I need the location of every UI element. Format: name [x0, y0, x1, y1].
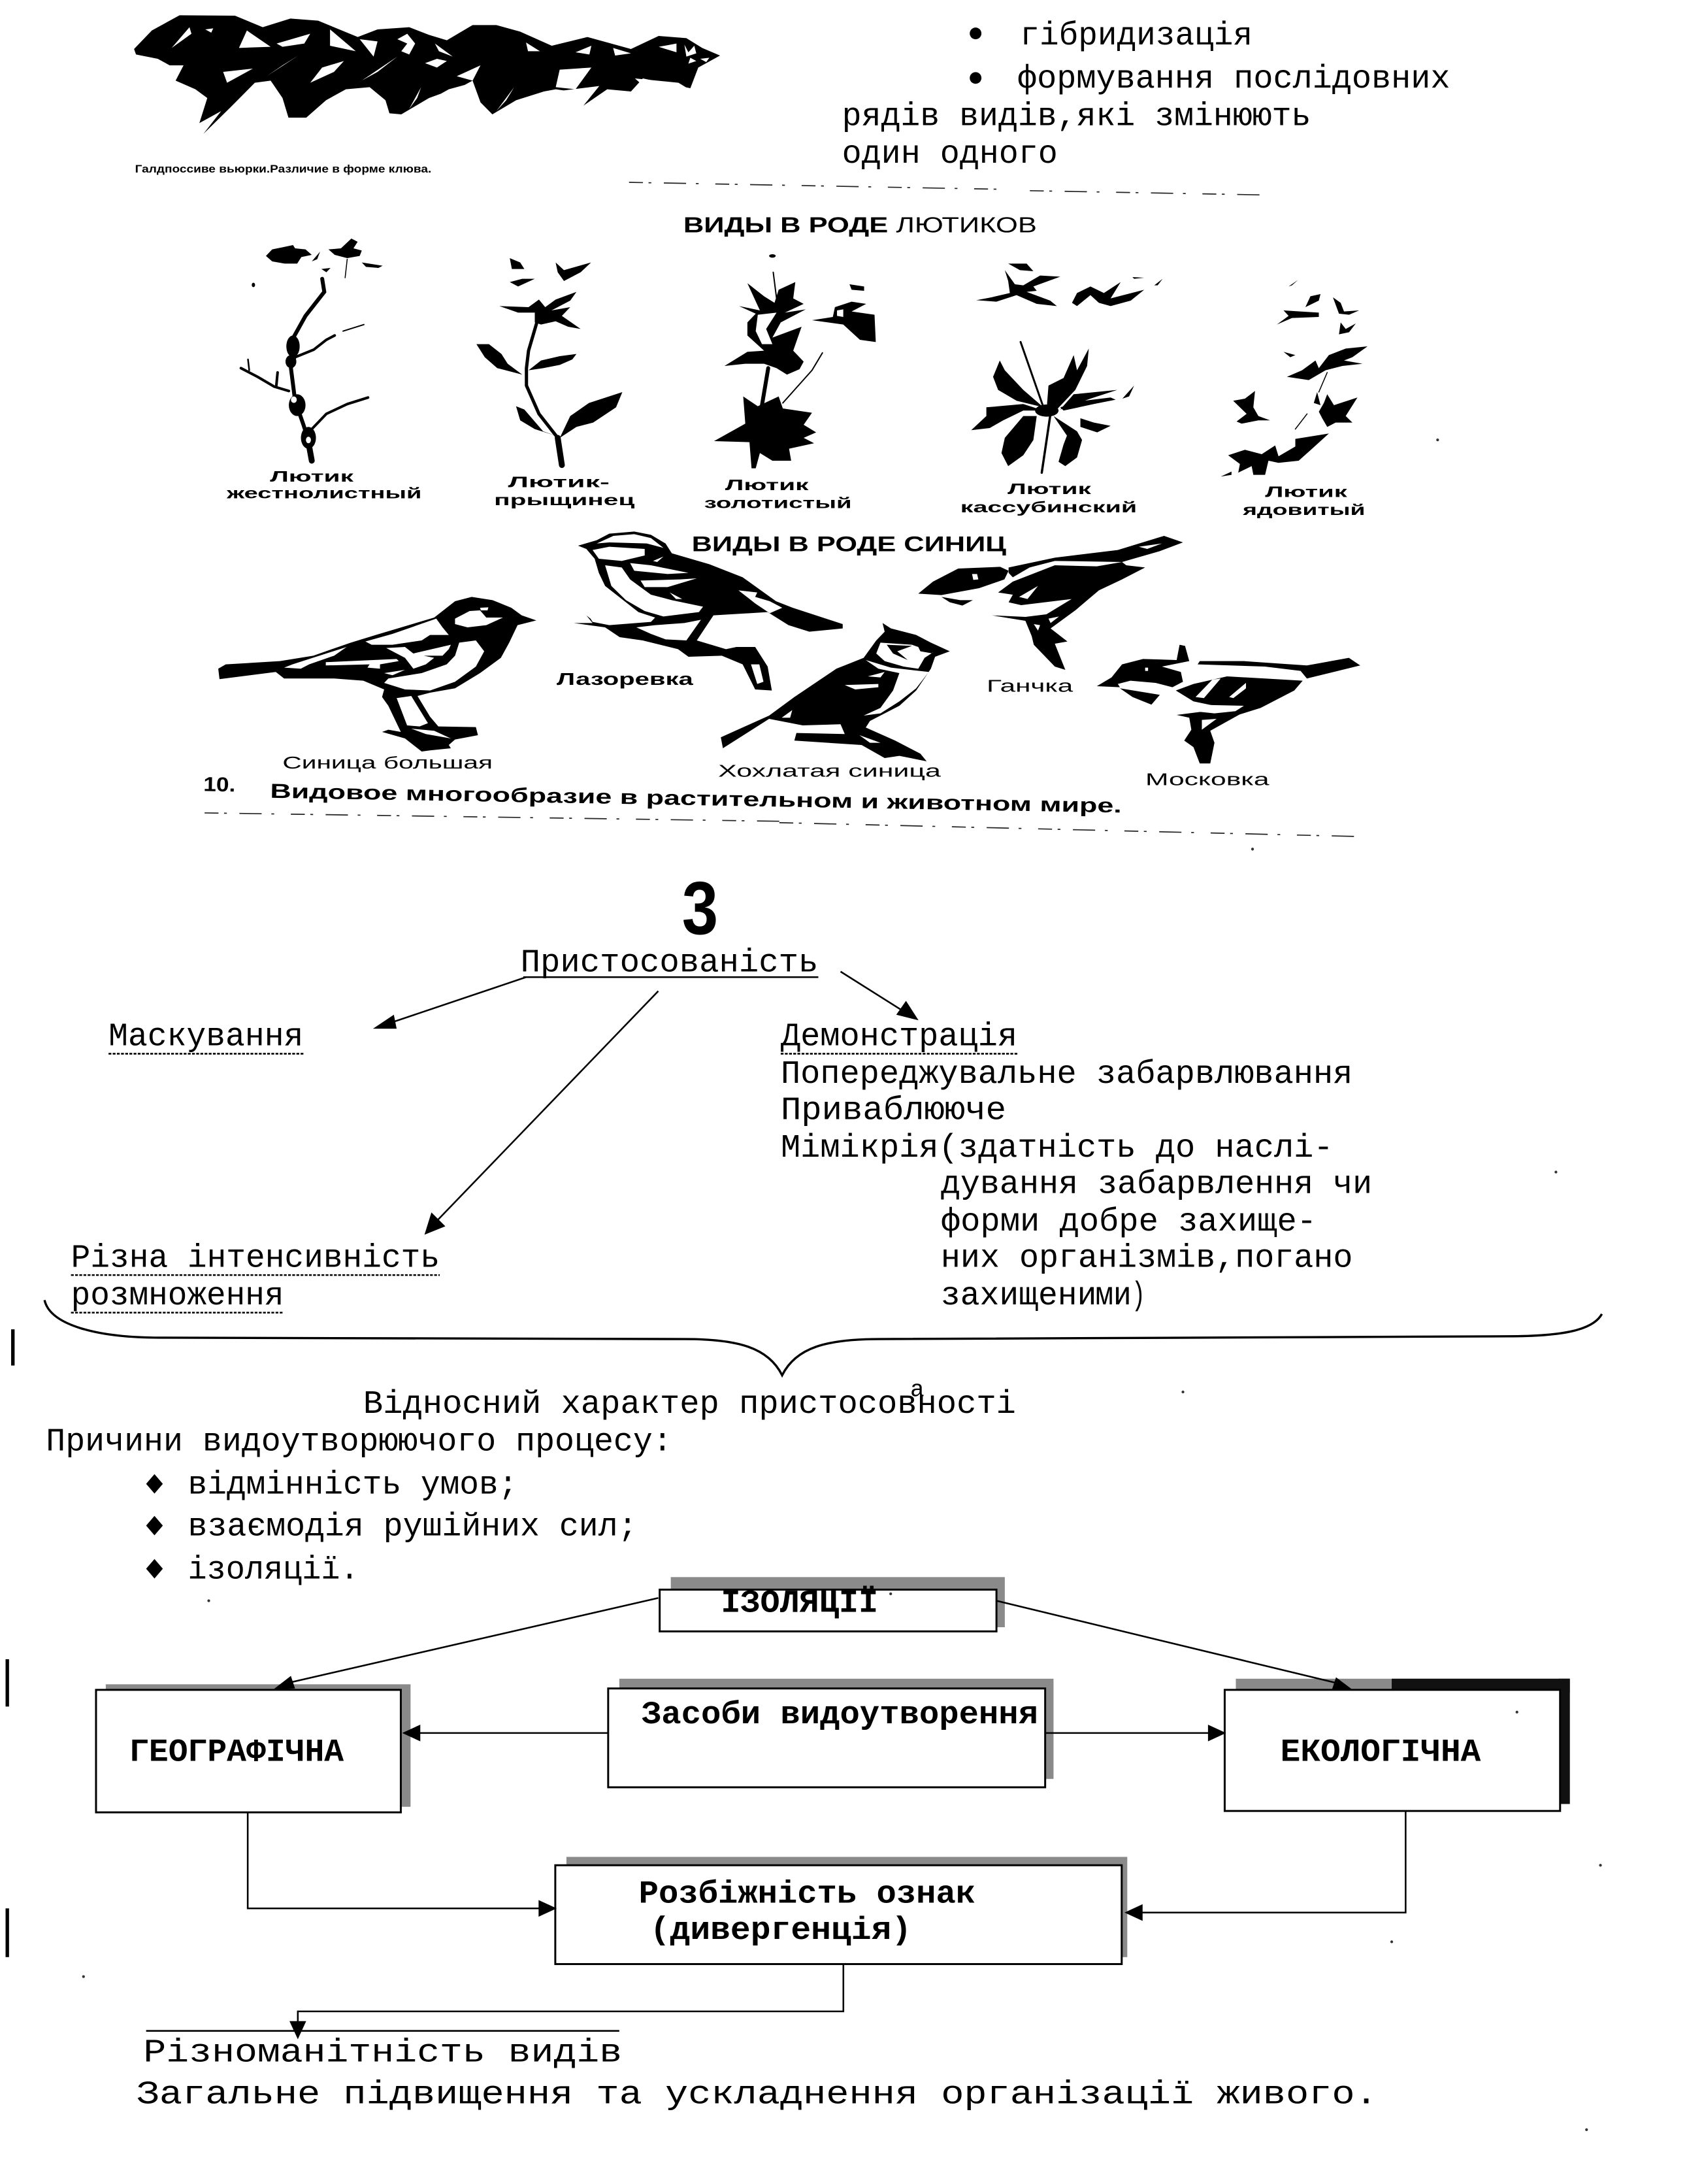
arrow: isolations to ecological	[996, 1601, 1352, 1690]
arrow: means to ecological	[1045, 1725, 1226, 1742]
text: reproduction intensity	[71, 1240, 440, 1315]
text: demonstration list: Демонстрація	[781, 1019, 1017, 1056]
plant labels: жестнолистный	[226, 485, 421, 502]
text: demonstration list: них організмів,погано	[941, 1240, 1352, 1277]
plant labels	[226, 468, 1366, 518]
plant labels: ядовитый	[1242, 501, 1366, 518]
text: causes of speciation: взаємодія рушійних сил;	[188, 1508, 638, 1546]
panel: buttercup species	[226, 239, 1368, 518]
text: relative character of adaptedness: а	[910, 1376, 925, 1403]
text: causes of speciation: відмінність умов;	[188, 1467, 517, 1504]
plant: third buttercup	[714, 254, 876, 469]
plant labels: Лютик	[270, 468, 353, 485]
text: species diversity conclusion: Різноманітність видів	[143, 2035, 622, 2072]
box: divergence: (дивергенція)	[650, 1912, 911, 1949]
text: reproduction intensity: Різна інтенсивність	[71, 1240, 440, 1277]
text block: hybridisation list: рядів видів,які змінюють	[842, 99, 1311, 136]
box: divergence	[555, 1857, 1127, 1964]
plant labels: прыщинец	[494, 491, 635, 508]
text: demonstration list: и	[1113, 1278, 1132, 1315]
plant labels: Лютик	[725, 476, 809, 493]
bird labels: Московка	[1145, 770, 1270, 789]
bird labels: Лазоревка	[557, 670, 694, 689]
figure caption	[203, 772, 1122, 817]
box: means of speciation: Засоби видоутворення	[642, 1696, 1038, 1733]
box: ecological: ЕКОЛОГІЧНА	[1281, 1734, 1481, 1770]
finch caption: Галдпоссиве вьюрки.Различие в форме клюва.	[135, 163, 431, 175]
arrow: isolations to geographic	[272, 1598, 659, 1690]
arrow: ecological to divergence	[1124, 1811, 1405, 1921]
text: reproduction intensity: розмноження	[71, 1278, 284, 1315]
text: species diversity conclusion: Загальне підвищення та ускладнення організації живого.	[137, 2076, 1378, 2113]
text: demonstration list: захищени	[941, 1278, 1096, 1315]
text: demonstration list: форми добре захище-	[941, 1204, 1317, 1241]
plant labels: Лютик-	[508, 474, 610, 491]
panel: tit species	[218, 531, 1360, 789]
plant labels: кассубинский	[960, 499, 1137, 516]
plant labels: золотистый	[704, 494, 852, 511]
plant labels: Лютик	[1265, 483, 1347, 500]
brace	[44, 1300, 1602, 1375]
text: camouflage: Маскування	[108, 1019, 303, 1056]
text: species diversity conclusion	[137, 2031, 1378, 2113]
box: geographic: ГЕОГРАФІЧНА	[129, 1734, 344, 1770]
heading: tit species: ВИДЫ В РОДЕ СИНИЦ	[692, 532, 1007, 555]
arrow: geographic to divergence	[248, 1812, 557, 1917]
box: divergence: Розбіжність ознак	[639, 1876, 975, 1913]
text: demonstration list: дування забарвлення чи	[941, 1166, 1372, 1203]
text: demonstration list: Мімікрія(здатність до наслі-	[781, 1130, 1334, 1167]
text: causes of speciation	[46, 1423, 672, 1589]
finch silhouettes	[134, 15, 720, 134]
text block: hybridisation list: один одного	[842, 136, 1058, 173]
plant: fifth buttercup	[1221, 280, 1368, 476]
arrow: divergence to species diversity	[289, 1964, 844, 2039]
heading: adaptedness: Пристосованість	[521, 945, 818, 982]
bird: crested tit	[721, 623, 950, 761]
flowchart: isolation and speciation	[96, 1577, 1570, 2039]
bird: coal tit top right	[918, 536, 1183, 670]
arrow: means to geographic	[402, 1725, 608, 1742]
text block: hybridisation list: гібридизація	[1020, 18, 1253, 55]
box: ecological	[1224, 1679, 1570, 1811]
plant: second buttercup	[476, 258, 622, 465]
box: isolations: ІЗОЛЯЦІЇ	[721, 1585, 878, 1622]
arrow to reproduction intensity	[425, 991, 659, 1234]
arrow to demonstration	[841, 972, 919, 1020]
text: relative character of adaptedness: Відносний характер пристосовності	[363, 1386, 1016, 1423]
section number 3: 3	[682, 867, 718, 950]
plant: fourth buttercup	[971, 263, 1162, 472]
text: causes of speciation: ізоляції.	[188, 1551, 359, 1589]
text: demonstration list: Приваблююче	[781, 1093, 1006, 1130]
diagram: adaptedness tree	[44, 945, 1602, 1375]
box: isolations	[660, 1577, 1005, 1631]
text: demonstration list: )	[1132, 1278, 1145, 1315]
bird: blue tit	[574, 531, 843, 691]
box: geographic	[96, 1684, 410, 1812]
arrow to camouflage	[373, 977, 526, 1029]
bird: marsh tit	[1097, 645, 1360, 763]
heading: buttercup species: ВИДЫ В РОДЕ ЛЮТИКОВ	[683, 213, 1037, 237]
text: demonstration list: Попереджувальне забарвлювання	[781, 1056, 1352, 1093]
bird: great tit	[218, 597, 536, 752]
bird labels: Ганчка	[987, 678, 1074, 696]
text block: hybridisation list: формування послідовних	[1017, 61, 1450, 98]
bird labels: Хохлатая синица	[718, 763, 942, 781]
plant: first buttercup	[241, 239, 383, 461]
plant labels: Лютик	[1008, 480, 1091, 497]
text: causes of speciation: Причини видоутворюючого процесу:	[46, 1423, 672, 1461]
figure caption: 10.	[203, 772, 236, 796]
figure caption: Видовое многообразие в растительном и животном мире.	[270, 780, 1122, 817]
text: demonstration list	[781, 1019, 1372, 1315]
illustration: Galapagos finches	[134, 15, 720, 175]
box: means of speciation	[608, 1679, 1053, 1787]
bird labels: Синица большая	[282, 754, 493, 772]
bird labels	[282, 670, 1270, 789]
text: demonstration list: ми	[1095, 1278, 1132, 1315]
text block: hybridisation list	[842, 18, 1450, 173]
